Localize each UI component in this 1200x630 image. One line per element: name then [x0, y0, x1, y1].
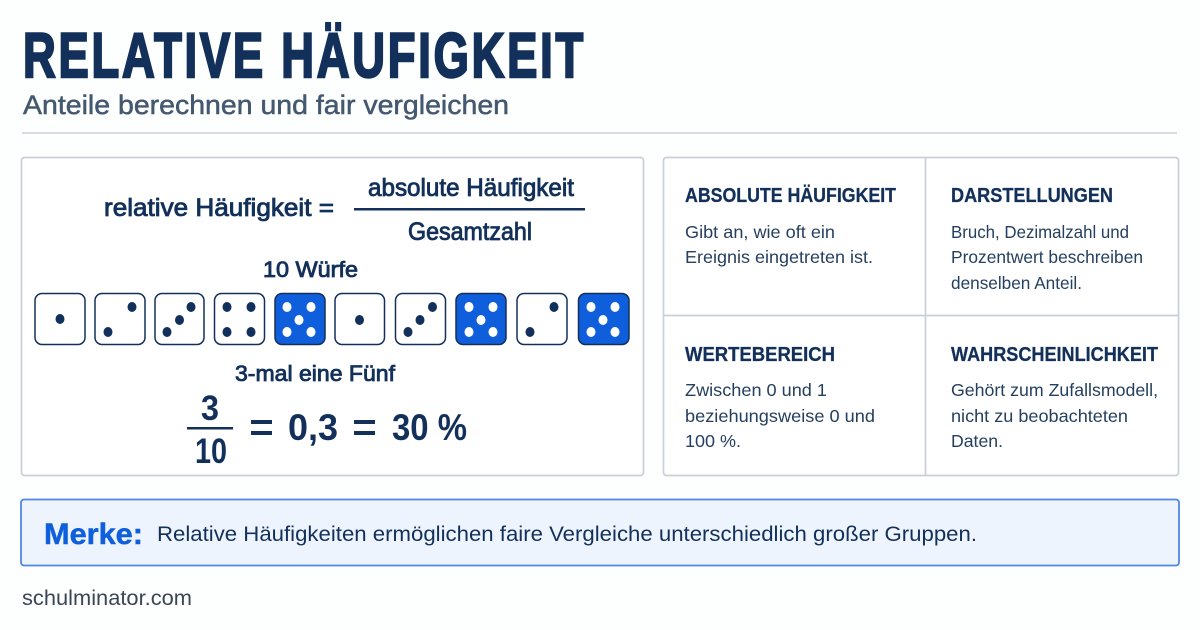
callout: remember: Merke:	[44, 518, 143, 551]
dice row	[35, 294, 629, 344]
card: representations	[951, 184, 1143, 293]
panel: formula and dice example	[22, 158, 644, 476]
formula: relative frequency: relative Häufigkeit =	[104, 194, 334, 222]
panel: facts grid	[664, 158, 1178, 476]
card: value range: WERTEBEREICH	[685, 343, 835, 366]
result equation: 30 %	[392, 407, 467, 448]
result equation: 3	[201, 389, 219, 428]
card: probability	[951, 343, 1158, 451]
card: value range: Zwischen 0 und 1	[685, 380, 827, 400]
card: representations: Prozentwert beschreiben	[951, 247, 1143, 267]
card: value range: beziehungsweise 0 und	[685, 406, 875, 426]
die: three	[155, 294, 204, 344]
label: three times a five: 3-mal eine Fünf	[235, 361, 396, 386]
card: value range: 100 %.	[685, 431, 741, 451]
card: probability: Daten.	[951, 431, 1003, 451]
card: probability: Gehört zum Zufallsmodell,	[951, 380, 1158, 400]
card: absolute frequency: Ereignis eingetreten ist.	[685, 247, 873, 267]
label: 10 throws: 10 Würfe	[263, 257, 358, 282]
result equation	[187, 389, 467, 471]
die: two	[95, 294, 145, 344]
die: one	[35, 294, 85, 344]
callout: remember: Relative Häufigkeiten ermöglichen faire Vergleiche unterschiedlich großer Gruppen.	[157, 522, 977, 546]
footer: source: schulminator.com	[22, 586, 192, 610]
result equation: 10	[195, 432, 227, 471]
title: RELATIVE HÄUFIGKEIT	[23, 20, 583, 91]
formula: relative frequency	[104, 174, 585, 246]
subtitle: Anteile berechnen und fair vergleichen	[23, 90, 509, 120]
callout: remember	[21, 500, 1179, 566]
die: five highlighted	[578, 294, 629, 344]
card: absolute frequency	[685, 184, 896, 267]
card: value range	[685, 343, 875, 451]
die: five highlighted	[275, 294, 325, 344]
card: representations: denselben Anteil.	[951, 273, 1082, 293]
die: four	[214, 294, 264, 344]
formula: relative frequency: absolute Häufigkeit	[368, 174, 574, 202]
card: representations: DARSTELLUNGEN	[951, 184, 1113, 207]
die: one	[335, 294, 384, 344]
card: representations: Bruch, Dezimalzahl und	[951, 222, 1129, 242]
die: two	[517, 294, 567, 344]
result equation: 0,3	[288, 407, 338, 448]
die: five highlighted	[456, 294, 506, 344]
formula: relative frequency: Gesamtzahl	[408, 218, 532, 246]
die: three	[396, 294, 446, 344]
card: probability: nicht zu beobachteten	[951, 406, 1128, 426]
card: absolute frequency: Gibt an, wie oft ein	[685, 222, 835, 242]
card: probability: WAHRSCHEINLICHKEIT	[951, 343, 1158, 366]
card: absolute frequency: ABSOLUTE HÄUFIGKEIT	[685, 184, 896, 207]
